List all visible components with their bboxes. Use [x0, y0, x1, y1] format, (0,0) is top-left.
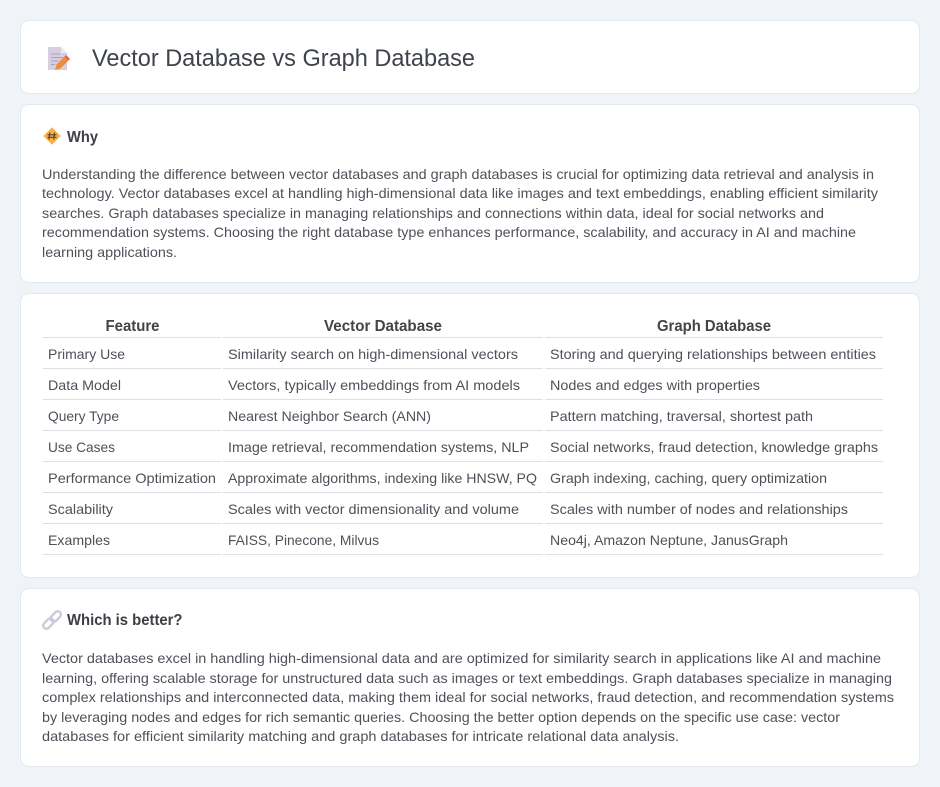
table row: examples: FAISS, Pinecone, Milvus	[228, 532, 379, 548]
table row: data model	[43, 377, 883, 400]
table row: performance optimization: Approximate algorithms, indexing like HNSW, PQ	[228, 470, 537, 486]
panel: which is better	[20, 588, 920, 766]
table row: primary use: Primary Use	[48, 346, 125, 362]
table row: performance optimization: Graph indexing, caching, query optimization	[550, 470, 827, 486]
table row: examples: Examples	[48, 532, 110, 548]
table row: query type: Pattern matching, traversal, shortest path	[550, 408, 813, 424]
text block: which is better paragraph: learning, offering scalable storage for unstructured data such as images or text embeddings. Graph databases specialize in managing	[42, 670, 892, 686]
panel: comparison table	[20, 294, 920, 578]
text block: why paragraph	[42, 166, 878, 260]
heading: why: Why	[67, 129, 98, 146]
table row: scalability	[43, 501, 883, 524]
text block: why paragraph: searches. Graph databases specialize in managing relationships and connections within data, ideal for social networks and	[42, 205, 824, 221]
table row: examples: Neo4j, Amazon Neptune, JanusGraph	[550, 532, 788, 548]
table header row: Feature	[106, 318, 160, 335]
text block: which is better paragraph: by leveraging nodes and edges for rich semantic queries. Choosing the better option depends on the specific use case: vector	[42, 709, 840, 725]
table row: query type: Nearest Neighbor Search (ANN)	[228, 408, 431, 424]
text block: why paragraph: learning applications.	[42, 244, 177, 260]
table row: primary use: Similarity search on high-dimensional vectors	[228, 346, 518, 362]
text block: why paragraph: technology. Vector databases excel at handling high-dimensional data like images and text embeddings, enabling efficient similarity	[42, 185, 878, 201]
text block: which is better paragraph	[42, 650, 894, 744]
table row: examples	[43, 532, 883, 555]
table row: primary use: Storing and querying relationships between entities	[550, 346, 876, 362]
table row: data model: Data Model	[48, 377, 121, 393]
table header row: Graph Database	[657, 318, 771, 335]
text block: which is better paragraph: databases for efficient similarity matching and graph databases for intricate relational data analysis.	[42, 728, 679, 744]
table row: scalability: Scalability	[48, 501, 113, 517]
table row: performance optimization: Performance Optimization	[48, 470, 216, 486]
table row: scalability: Scales with vector dimensionality and volume	[228, 501, 519, 517]
table row: scalability: Scales with number of nodes and relationships	[550, 501, 848, 517]
table row: data model: Vectors, typically embeddings from AI models	[228, 377, 520, 393]
table row: use cases	[43, 439, 883, 462]
icon: memo with pencil	[48, 47, 70, 70]
text block: why paragraph: Understanding the difference between vector databases and graph databases is crucial for optimizing data retrieval and analysis in	[42, 166, 874, 182]
panel: why	[20, 104, 920, 282]
table row: use cases: Image retrieval, recommendation systems, NLP	[228, 439, 529, 455]
table row: use cases: Social networks, fraud detection, knowledge graphs	[550, 439, 878, 455]
icon: chain link	[42, 610, 62, 630]
icon: warning diamond	[44, 128, 60, 144]
table header row	[106, 318, 771, 335]
table row: query type	[43, 408, 883, 431]
text block: which is better paragraph: Vector databases excel in handling high-dimensional data and are optimized for similarity search in applications like AI and machine	[42, 650, 881, 666]
heading: which is better: Which is better?	[67, 612, 182, 629]
table header row: Vector Database	[324, 318, 442, 335]
text block: which is better paragraph: complex relationships and interconnected data, making them ideal for social networks, fraud detection, and recommendation systems	[42, 689, 894, 705]
table row: query type: Query Type	[48, 408, 119, 424]
title: Vector Database vs Graph Database	[92, 45, 475, 72]
table row: use cases: Use Cases	[48, 439, 115, 455]
table row: primary use	[43, 337, 883, 369]
table row: performance optimization	[43, 470, 883, 493]
text block: why paragraph: recommendation systems. Choosing the right database type enhances performance, scalability, and accuracy in AI and machine	[42, 224, 856, 240]
panel: header	[20, 20, 920, 94]
table row: data model: Nodes and edges with properties	[550, 377, 760, 393]
